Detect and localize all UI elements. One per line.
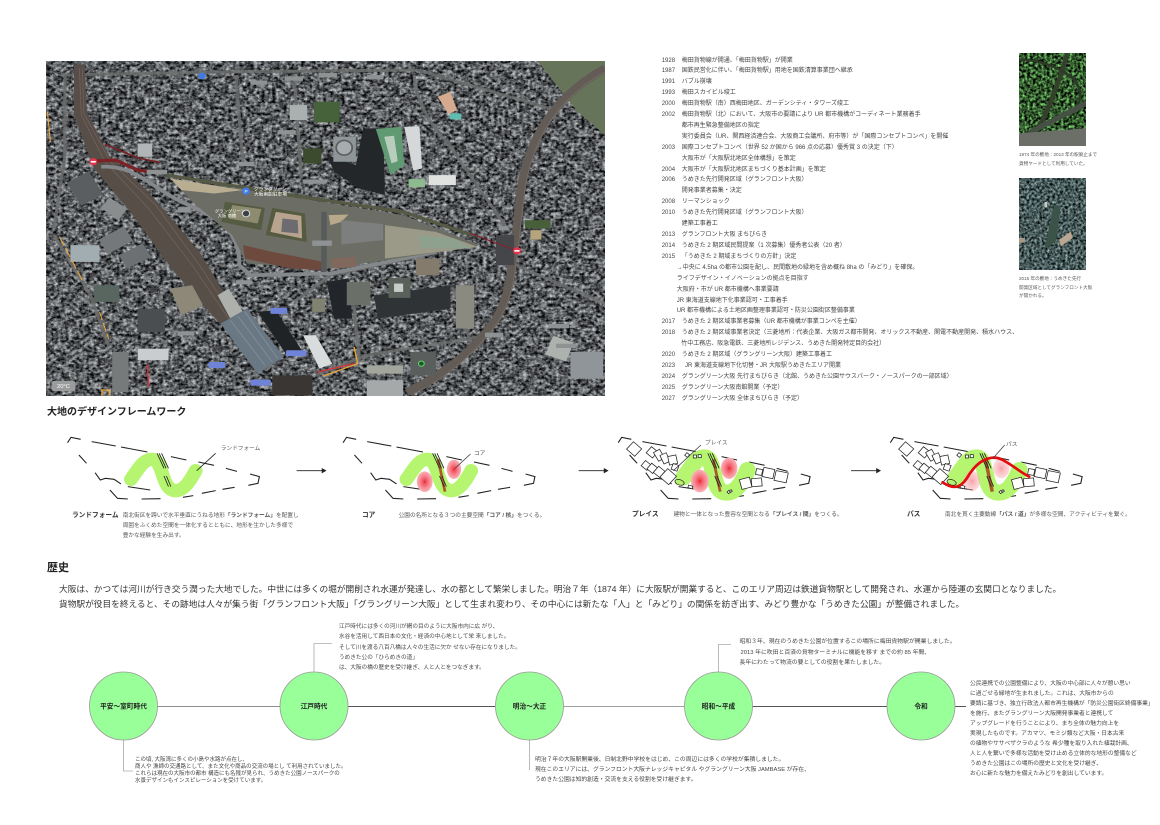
text: 江戸時代: は、大阪の橋の歴史を受け継ぎ、人と人とをつなぎます。 [339,665,485,671]
development chronology: 2013 [662,232,675,238]
node: 令和: 令和 [914,702,928,710]
congested road segments [47,112,516,395]
development chronology: リーマンショック [682,199,730,205]
caption for 1974 photo [1019,152,1097,166]
framework diagrams [67,436,1083,501]
development chronology: 竹中工務店、阪急電鉄、三菱地所レジデンス、うめきた開発特定目的会社） [681,341,885,347]
development chronology: 2000 [662,101,675,107]
diagram: path [890,437,1082,499]
history paragraph: 大阪は、かつては河川が行き交う潤った大地でした。中世には多くの堀が開削され水運が発達し、水の都として繁栄しました。明治７年（1874 年）に大阪駅が開業すると、このエリア周辺は鉄道貨物駅として開発され、水運から陸運の玄関口となりました。 [59,584,1061,594]
text: 平安〜室町時代 [135,756,346,784]
text: 江戸時代: 江戸時代には多くの河川が網の目のように大阪市内に広 がり、 [339,624,498,630]
node: 平安〜室町時代: 平安～室町時代 [100,702,147,710]
development chronology: 開発事業者募集・決定 [682,188,742,194]
west tower cluster [67,171,103,206]
caption: core: コア [362,512,375,519]
leader lines [124,644,731,771]
node: 江戸時代 [280,672,348,740]
text: 昭和〜平成 [740,638,956,666]
development chronology: 建築工事着工 [682,221,718,227]
text: 明治〜大正: 明治７年の大阪駅開業後、日制北野中学校をはじめ、この周辺には多くの学校が集積しました。 [535,757,784,763]
station platforms [218,289,243,319]
caption for 1974 photo: 貨物ヤードとして利用していた。 [1019,161,1088,166]
temperature badge: 20°C [57,384,70,390]
text: 平安〜室町時代: これらは現在の大阪市の都市 構造にも名残が見られ、うめきた公園ノースパークの [135,770,340,776]
development chronology: 1991 [662,79,675,85]
no-entry markers [89,158,521,255]
parking pins and place labels [198,73,424,366]
development chronology: 2023 [662,363,675,369]
development chronology: 2002 [662,112,675,118]
text: 平安〜室町時代: 水景デザインもインスピレーションを受けています。 [135,778,266,784]
node: 令和 [887,672,955,740]
node: 江戸時代: 江戸時代 [301,702,328,710]
temperature badge [51,381,75,391]
text: 明治〜大正: うめきた公園は知的創造・交流を支える役割を受け継ぎます。 [535,777,697,783]
caption: landform: ランドフォーム [72,512,119,519]
aerial photo 2013 [1019,178,1086,270]
development chronology: 都市再生緊急整備地区の指定 [682,123,760,129]
development chronology: うめきた 2 期区域（グラングリーン大阪）建築工事着工 [682,352,832,358]
text: 令和: 実現したものです。アカマツ、モミジ類など大阪・日本古来 [970,731,1124,737]
city roads [54,70,605,375]
development chronology: 国鉄民営化に伴い、「梅田貨物駅」用地を国鉄清算事業団へ継承 [682,68,853,74]
north high-rise block with shadows [327,128,385,195]
arrow 2 [579,468,609,473]
node: 明治〜大正 [496,672,564,740]
south tower cluster [327,279,352,319]
node: 昭和〜平成 [684,672,752,740]
text: 江戸時代 [339,622,521,671]
development chronology: うめきた 2 期区域民間提案（1 次募集）優秀者公表（20 者） [682,243,846,249]
development chronology: JR 東海道支線地下化事業認可・工事着手 [677,298,788,304]
development chronology: 実行委員会（UR、関西経済連合会、大阪商工会議所、府市等）が「国際コンセプトコンペ」を開催 [682,134,948,140]
caption: landform: 周囲をふくめた空間を一体化するとともに、地形を生かした多様で [123,523,293,529]
timeline axis [157,706,966,708]
station name tags [209,308,306,386]
development chronology: 2025 [662,385,675,391]
text: 江戸時代: うめきた公の「ひらめきの道」 [339,655,418,661]
caption for 2013 photo: 2015 年の敷地：うめきた先行 [1019,276,1081,281]
parking pins and place labels: 大阪南館駐車場 [254,191,287,197]
diagram: core: コア [474,450,486,457]
development site [170,178,480,269]
development chronology: 2010 [662,210,675,216]
text: 令和: 人と人を繋いで多様な活動を受け止める立体的な地形の整備など [970,751,1137,757]
development chronology: 「うめきた 2 期域まちづくりの方針」決定 [682,254,796,260]
node: 明治〜大正: 明治～大正 [513,702,547,710]
caption: path: パス [907,511,920,518]
right elevated railway [407,68,605,392]
text: 令和 [970,680,1154,777]
history paragraph: 貨物駅が役目を終えると、その跡地は人々が集う街「グランフロント大阪」「グラングリーン大阪」として生まれ変わり、その中心には新たな「人」と「みどり」の関係を紡ぎ出す、みどり豊かな「うめきた公園」が整備されました。 [59,599,964,609]
arrow 1 [297,468,327,473]
development chronology: JR 東海道支線地下化切替・JR 大阪駅うめきたエリア開業 [685,363,841,369]
development chronology: 大阪市が「大阪駅北地区全体構想」を策定 [682,156,796,162]
text: 令和: の植物やササベザクラのような 希少種を取り入れた植栽計画、 [970,741,1133,747]
caption: core: 公園の名所となる３つの主要空間「コア / 核」をつくる。 [399,513,545,519]
diagram: landform: ランドフォーム [221,445,261,452]
development chronology: 大阪市が「大阪駅北地区まちづくり基本計画」を策定 [682,166,826,172]
heading: history: 歴史 [47,562,69,574]
development chronology: ライフデザイン・イノベーションの拠点を目指す [677,276,809,282]
caption: place: プレイス [632,511,659,518]
development chronology: うめきた先行開発区域（グランフロント大阪） [682,177,808,183]
text: 令和: 要請に基づき、独立行政法人都市再生機構が「防災公園街区終備事業」 [970,700,1154,706]
text: 令和: 公民連携での公園整備により、大阪の中心部に人々が憩い思い [970,681,1131,687]
parking pins and place labels: グラングリーン [215,208,245,213]
development chronology: うめきた 2 期区域事業者決定（三菱地所：代表企業、大阪ガス都市開発、オリックス不動産、関電不動産開発、積水ハウス、 [682,330,1018,336]
upper-right riverbank [538,61,605,135]
text: 明治〜大正 [535,756,810,783]
diagram: landform [68,437,261,499]
text: 令和: に過ごせる緑地が生まれました。これは、大阪市からの [970,690,1114,696]
caption for 2013 photo [1019,276,1092,298]
left railway corridor [74,65,238,325]
development chronology: 2006 [662,177,675,183]
history paragraph [59,584,1061,609]
development chronology: 2008 [662,199,675,205]
node: 昭和〜平成: 昭和～平成 [702,702,736,710]
parking pins and place labels: グラングリーン [254,186,287,192]
aerial photo 1974 [1019,53,1086,146]
diagram: place [618,437,810,499]
caption for 2013 photo: 開発区域としてグランフロント大阪 [1019,284,1092,290]
development chronology [662,56,1018,402]
text: 令和: うめきた公園はこの場所の歴史と文化を受け継ぎ、 [970,761,1102,767]
text: 江戸時代: そして川を渡る八百八橋は人々の生活に欠か せない存在になりました。 [339,645,521,651]
development chronology: 1928 [662,58,675,64]
arrow 3 [851,468,881,473]
Osaka station roof [221,309,284,374]
development chronology: 2014 [662,243,675,249]
text: 明治〜大正: 現在このエリアには、グランフロント大阪ナレッジキャピタル やグラングリーン大阪 JAMBASE が存在、 [535,767,810,773]
heading: design framework: 大地のデザインフレームワーク [47,406,186,418]
text: 平安〜室町時代: この頃, 大阪湾に多くの小島や水路が点在し、 [135,757,248,763]
caption: core [362,512,545,519]
text: 昭和〜平成: 昭和３年、現在のうめきた公園が位置するこの場所に梅田貨物駅が開業しました。 [740,639,956,645]
development chronology: 2027 [662,396,675,402]
parking pins and place labels: P [244,189,248,194]
diagram: place: プレイス [705,440,728,447]
development chronology: グラングリーン大阪 全体まちびらき（予定） [682,396,803,402]
text: 令和: お心に新たな魅力を備えたみどりを創出しています。 [970,771,1107,777]
aerial map photograph [46,61,605,396]
diagram: path: パス [1006,441,1018,448]
development chronology: 2015 [662,254,675,260]
caption: landform [72,512,299,538]
development chronology: 大阪府・市が UR 都市機構へ事業要請 [677,287,779,293]
development chronology: グランフロント大阪 まちびらき [682,232,767,238]
development chronology: 1987 [662,68,675,74]
development chronology: UR 都市機構による土地区画整理事業認可・防災公園街区整備事業 [677,308,855,314]
site perimeter road [101,167,436,275]
development chronology: 2004 [662,166,675,172]
development chronology: 梅田貨物駅（南）西梅田地区、ガーデンシティ・タワーズ竣工 [682,101,849,107]
diagram: core [343,437,535,499]
caption for 1974 photo: 1974 年の敷地：2013 年の駅廃止まで [1019,152,1097,157]
development chronology: 2024 [662,374,675,380]
text: 昭和〜平成: 2013 年に吹田と百済の貨物ターミナルに機能を移す までの約 85 年間、 [740,650,930,656]
development chronology: 2003 [662,145,675,151]
development chronology: 2018 [662,330,675,336]
caption: path [907,510,1131,518]
caption: landform: 豊かな経験を生み出す。 [123,532,185,538]
text: 昭和〜平成: 長年にわたって物流の要としての役割を果たしました。 [740,660,885,666]
development chronology: 2017 [662,319,675,325]
caption: place: 建物と一体となった豊容な空間となる「プレイス / 間」をつくる。 [674,512,843,518]
development chronology: グラングリーン大阪 先行まちびらき（北館、うめきた公園サウスパーク・ノースパークの一部区域） [682,374,953,380]
caption: place [632,510,843,518]
text: 江戸時代: 水谷を活用して西日本の文化・経済の中心地として栄 来しました。 [339,634,509,640]
development chronology: うめきた 2 期区域事業者募集（UR 都市機構が事業コンペを主催） [682,319,861,325]
development chronology: 2020 [662,352,675,358]
text: 令和: を施行、またグラングリーン大阪開発事業者と連携して [970,711,1113,717]
development chronology: →中央に 4.5ha の都市公園を配し、民間敷地の緑地を含め概ね 8ha の「みどり」を確保。 [677,265,918,271]
development chronology: 梅田貨物駅（北）において、大阪市の要請により UR 都市機構がコーディネート業務着手 [682,112,921,118]
caption: path: 南北を貫く主要動線「パス / 道」が多様な空間、アクティビティを繋ぐ。 [945,512,1131,518]
text: 令和: アップグレードを行うことにより、まち全体の魅力向上を [970,721,1119,727]
caption: landform: 南北街区を跨いで水平垂直にうねる地形「ランドフォーム」を配置し [123,513,299,519]
development chronology: 梅田貨物線が開通、「梅田貨物駅」が開業 [682,58,793,64]
street name tags [147,73,576,348]
development chronology: バブル崩壊 [682,79,712,85]
development chronology: グラングリーン大阪南館開業（予定） [682,385,783,391]
parking pins and place labels: 大阪 南館 [218,212,236,218]
development chronology: 1993 [662,90,675,96]
development chronology: 梅田スカイビル竣工 [682,90,736,96]
development chronology: うめきた先行開発区域（グランフロント大阪） [682,210,808,216]
node: 平安〜室町時代 [90,672,158,740]
development chronology: 国際コンセプトコンペ（世界 52 か国から 966 点の応募）優秀賞 3 の決定（下） [682,145,898,151]
text: 平安〜室町時代: 商人や 漁師の交通路として、また文化や商品の交流の場とし て利用されていました。 [135,764,346,770]
caption for 2013 photo: が開かれる。 [1019,293,1047,298]
